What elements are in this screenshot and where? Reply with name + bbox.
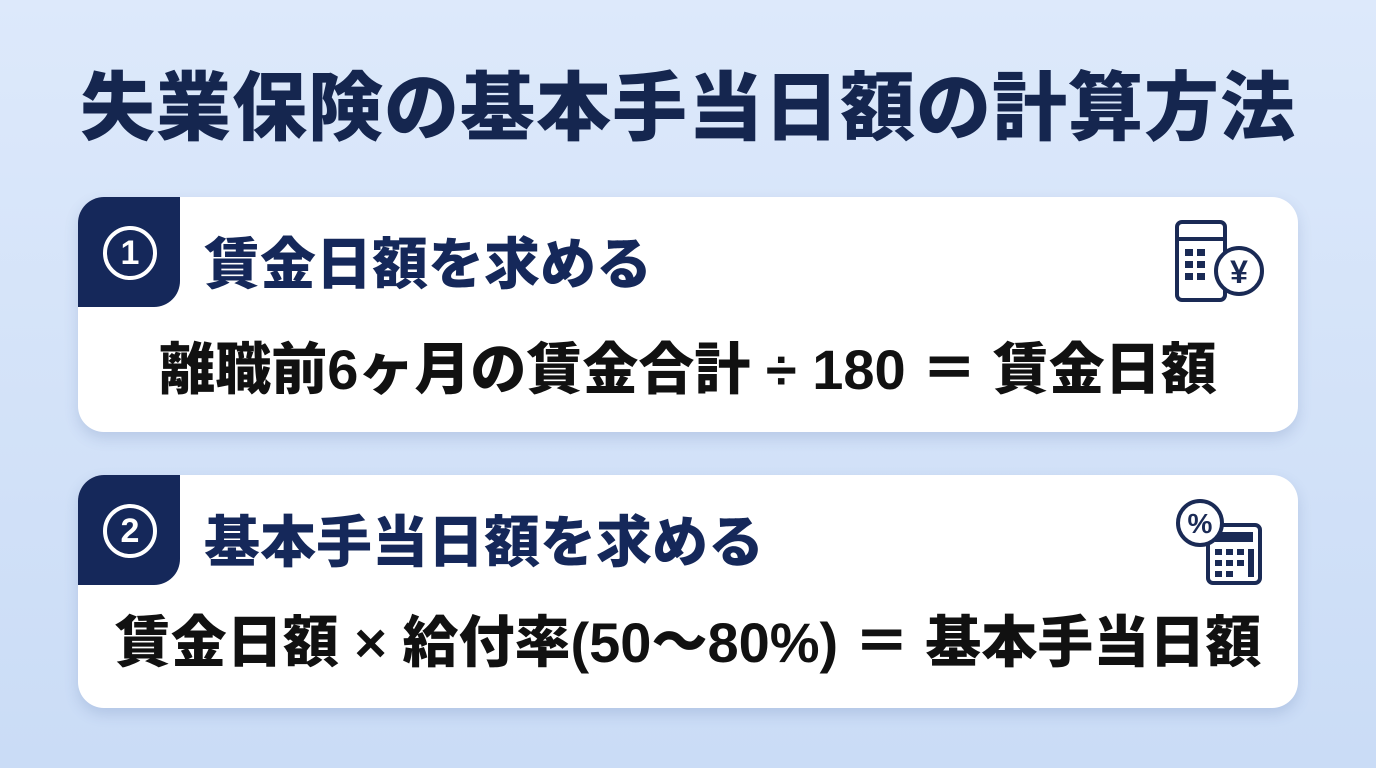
formula 1: 離職前6ヶ月の賃金合計 ÷ 180 ＝ 賃金日額	[159, 338, 1217, 401]
title: 失業保険の基本手当日額の計算方法	[80, 66, 1296, 150]
panel: step 2	[78, 475, 1298, 708]
formula 2: 賃金日額 × 給付率(50〜80%) ＝ 基本手当日額	[115, 611, 1261, 674]
panel: step 1	[78, 197, 1298, 432]
icon: calculator yen: ¥	[1230, 254, 1248, 290]
heading 1: 賃金日額を求める	[204, 233, 652, 296]
icon: calculator yen	[1175, 220, 1264, 302]
heading 2: 基本手当日額を求める	[204, 511, 764, 574]
badge 2	[78, 475, 180, 585]
badge 2: 2	[121, 512, 139, 550]
badge 1	[78, 197, 180, 307]
badge 1: 1	[121, 234, 139, 272]
icon: percent calculator: %	[1188, 508, 1213, 539]
icon: percent calculator	[1176, 499, 1262, 585]
